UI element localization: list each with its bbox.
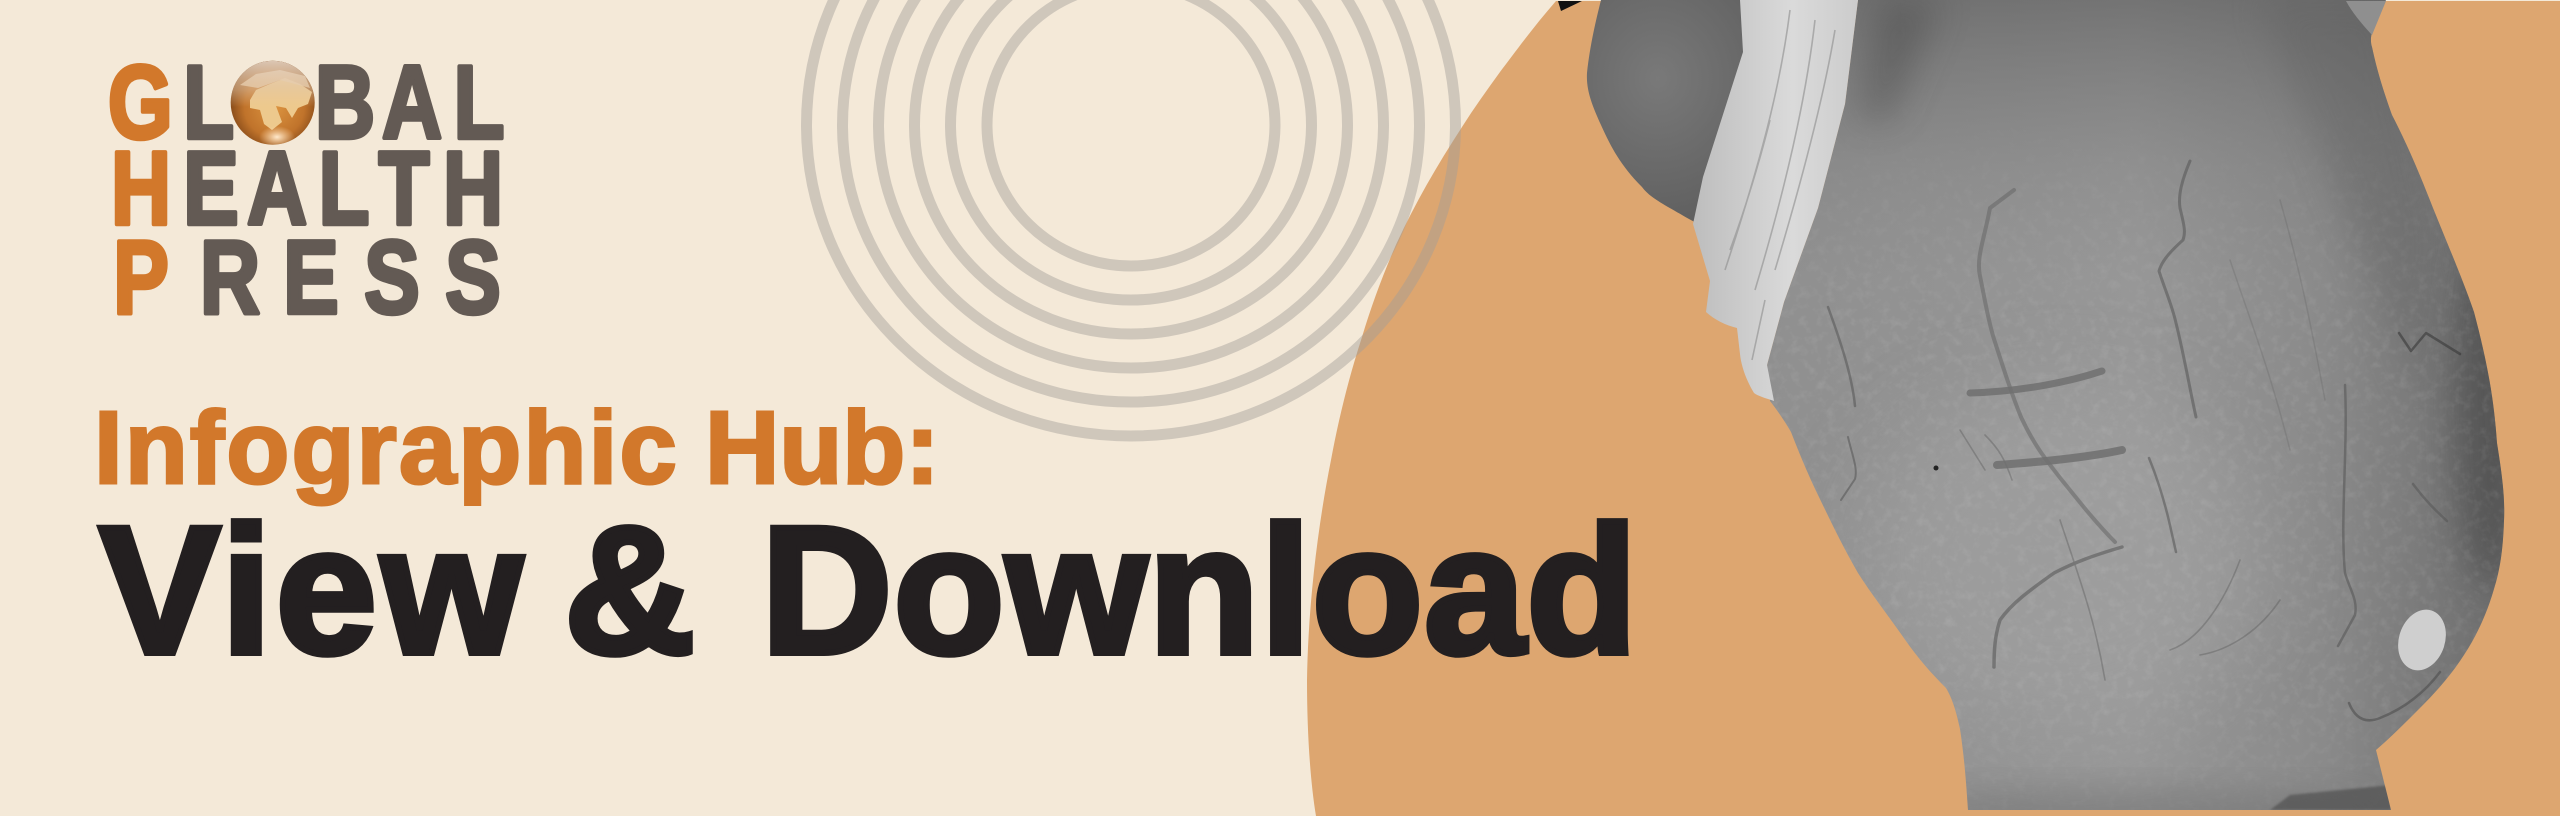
black fragment at top edge [1558, 1, 1582, 11]
logo wordmark: EALTH [183, 130, 503, 246]
veins [1828, 161, 2460, 720]
icon: globe [229, 59, 317, 148]
light cloth [1693, 0, 1858, 401]
heading: View & Download: & [564, 488, 695, 692]
abdomen silhouette [1760, 0, 2526, 816]
heading: Infographic Hub: Infographic [94, 390, 679, 505]
heading: Infographic Hub: Hub: [705, 390, 940, 505]
photo: grayscale abdomen with visible veins [1558, 0, 2526, 816]
logo wordmark: G [108, 44, 173, 160]
marker lines [1970, 371, 2122, 465]
cloth at top right edge [2346, 1, 2386, 35]
dark shadow at leg [2270, 785, 2391, 810]
decorative concentric rings [806, 0, 1456, 436]
skin mark dot [1934, 466, 1938, 470]
logo wordmark [108, 44, 504, 335]
skin texture [1820, 294, 2498, 706]
logo: Global Health Press [110, 60, 504, 316]
heading: View & Download: View [99, 488, 526, 692]
umbilicus [2398, 610, 2446, 670]
heading: View & Download: Download [761, 488, 1638, 692]
logo wordmark: LOBAL [183, 44, 504, 160]
logo wordmark: RESS [200, 219, 501, 335]
panel: orange background shape [1307, 1, 2560, 816]
dark cloth [1587, 0, 1790, 225]
logo wordmark: P [113, 219, 169, 335]
logo wordmark: H [111, 130, 171, 246]
